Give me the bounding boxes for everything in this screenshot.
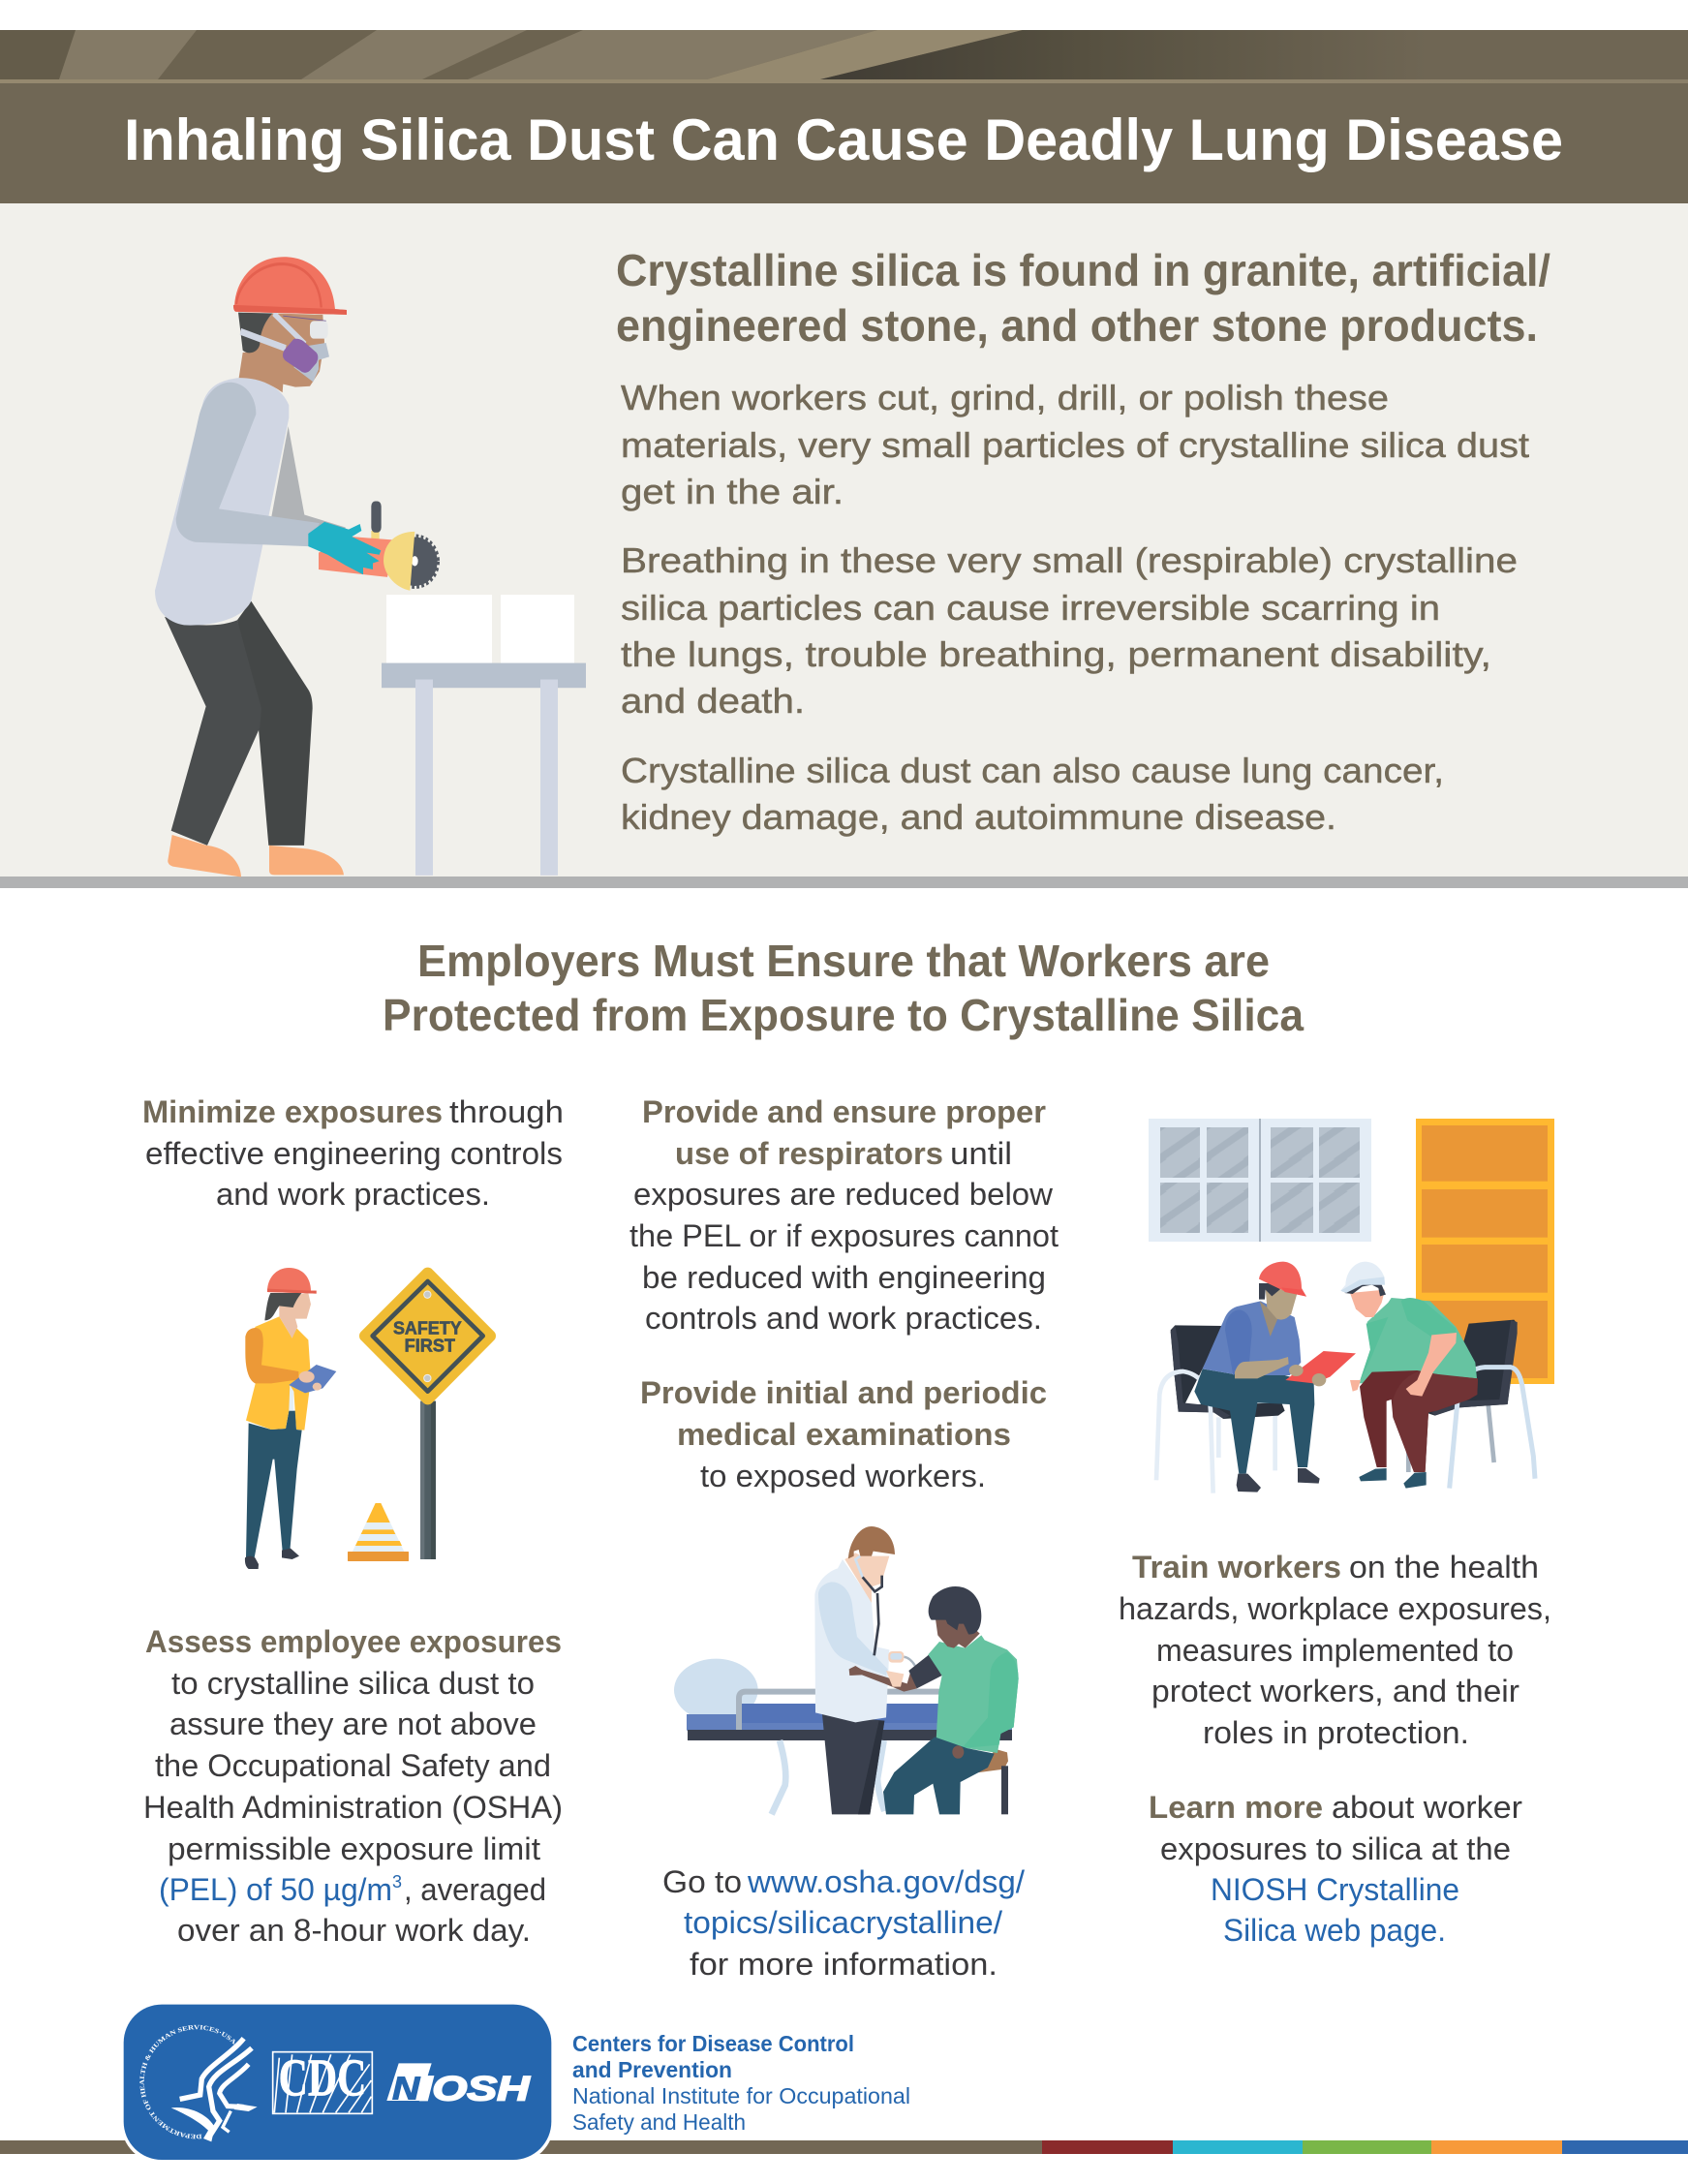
text block: other diseases: Crystalline silica dust can also cause lung cancer, xyxy=(621,751,1444,790)
text block: assess employee exposures: assure they are not above xyxy=(169,1707,537,1741)
text block: medical examinations: Provide initial and periodic xyxy=(640,1375,1047,1410)
text block: train workers xyxy=(1119,1550,1551,1750)
heading: where silica is found xyxy=(616,245,1550,351)
safety first sign xyxy=(365,1274,490,1399)
text block: respirators: the PEL or if exposures cannot xyxy=(629,1218,1059,1253)
illustration: worker with grinder at table xyxy=(155,257,586,877)
text block: respirators: until xyxy=(950,1136,1012,1171)
agency names: and Prevention xyxy=(572,2057,732,2082)
agency names: Safety and Health xyxy=(572,2109,746,2135)
text block: assess employee exposures xyxy=(143,1624,563,1948)
shelves xyxy=(1416,1119,1554,1384)
logo: CDC: CDC xyxy=(279,2048,366,2107)
text block: assess employee exposures: to crystalline silica dust to xyxy=(171,1666,535,1701)
text block: learn more: about worker xyxy=(1332,1790,1522,1825)
text block: assess employee exposures: , averaged xyxy=(404,1872,546,1907)
text block: respirators: controls and work practices. xyxy=(645,1301,1042,1336)
leaning worker in green xyxy=(1340,1262,1478,1489)
text block: OSHA link: www.osha.gov/dsg/ xyxy=(747,1864,1025,1899)
illustration: inspector and safety sign xyxy=(245,1268,490,1569)
text block: assess employee exposures: Health Administration (OSHA) xyxy=(143,1790,563,1825)
illustration: doctor examining worker xyxy=(674,1526,1019,1814)
logo panel xyxy=(124,2005,552,2160)
heading: employers must ensure: Employers Must Ensure that Workers are xyxy=(417,936,1270,986)
text block: train workers: protect workers, and their xyxy=(1151,1674,1519,1708)
heading: where silica is found: engineered stone, and other stone products. xyxy=(616,300,1538,351)
text block: assess employee exposures: Assess employee exposures xyxy=(145,1624,562,1659)
text block: learn more: Learn more xyxy=(1149,1790,1323,1825)
text block: respirators: Provide and ensure proper xyxy=(642,1094,1046,1129)
text block: train workers: measures implemented to xyxy=(1156,1633,1514,1668)
header banner xyxy=(0,30,1688,203)
text block: assess employee exposures: the Occupational Safety and xyxy=(155,1748,551,1783)
text block: minimize exposures: and work practices. xyxy=(216,1177,490,1212)
text block: respirators: be reduced with engineering xyxy=(642,1260,1046,1295)
text block: respirators: exposures are reduced below xyxy=(633,1177,1054,1212)
logo: HHS seal: DEPARTMENT OF HEALTH & HUMAN SERVICES·USA xyxy=(139,2024,235,2138)
text block: assess employee exposures: (PEL) of 50 µg/m xyxy=(159,1872,392,1907)
agency names: National Institute for Occupational xyxy=(572,2083,910,2108)
text block: how dust gets in the air: get in the air. xyxy=(621,472,844,511)
logo: NIOSH: IOSH xyxy=(419,2071,531,2108)
text block: medical examinations xyxy=(640,1375,1047,1493)
logo: NIOSH xyxy=(386,2063,531,2108)
inspector xyxy=(245,1268,336,1569)
heading: employers must ensure: Protected from Exposure to Crystalline Silica xyxy=(383,990,1304,1040)
text block: other diseases: kidney damage, and autoimmune disease. xyxy=(621,797,1336,837)
text block: respirators: use of respirators xyxy=(675,1136,943,1171)
agency names xyxy=(572,2031,910,2135)
column 2: respirators and medical exams xyxy=(629,1094,1059,1982)
text block: OSHA link: topics/silicacrystalline/ xyxy=(684,1905,1002,1940)
text block: train workers: Train workers xyxy=(1132,1550,1341,1584)
traffic cone xyxy=(348,1503,409,1561)
safety first sign: SAFETY xyxy=(393,1318,462,1338)
text block: learn more: exposures to silica at the xyxy=(1160,1831,1511,1866)
heading: where silica is found: Crystalline silica is found in granite, artificial/ xyxy=(616,245,1550,295)
text block: medical examinations: to exposed workers. xyxy=(700,1459,986,1493)
seated worker in blue xyxy=(1194,1262,1356,1492)
text block: assess employee exposures: 3 xyxy=(392,1872,402,1892)
text block: minimize exposures xyxy=(142,1094,564,1212)
text block: learn more: NIOSH Crystalline xyxy=(1211,1872,1459,1907)
roof band xyxy=(0,30,1688,83)
text block: how dust gets in the air xyxy=(621,378,1529,511)
panel: silica hazard xyxy=(0,203,1688,888)
text block: medical examinations: medical examinations xyxy=(677,1417,1011,1452)
left chair xyxy=(1156,1325,1285,1493)
text block: health effects: the lungs, trouble breathing, permanent disability, xyxy=(621,634,1491,674)
text block: train workers: roles in protection. xyxy=(1203,1715,1469,1750)
title: Inhaling Silica Dust Can Cause Deadly Lung Disease xyxy=(124,108,1563,172)
text block: learn more xyxy=(1149,1790,1522,1948)
text block: how dust gets in the air: materials, very small particles of crystalline silica dust xyxy=(621,425,1529,465)
safety first sign: FIRST xyxy=(405,1336,456,1356)
column 3: training and learn more xyxy=(1119,1119,1554,1948)
logo: NIOSH: N xyxy=(392,2071,420,2107)
footer xyxy=(0,2005,1688,2160)
right chair xyxy=(1408,1320,1535,1489)
illustration: workers in training xyxy=(1149,1119,1554,1493)
text block: minimize exposures: Minimize exposures xyxy=(142,1094,443,1129)
text block: assess employee exposures: permissible exposure limit xyxy=(168,1831,540,1866)
color stripe xyxy=(0,2140,1688,2154)
text block: train workers: on the health xyxy=(1349,1550,1539,1584)
text block: health effects: and death. xyxy=(621,681,805,721)
text block: how dust gets in the air: When workers cut, grind, drill, or polish these xyxy=(621,378,1389,417)
text block: minimize exposures: effective engineering controls xyxy=(145,1136,563,1171)
text block: train workers: hazards, workplace exposures, xyxy=(1119,1591,1551,1626)
window xyxy=(1149,1119,1371,1242)
text block: OSHA link: Go to xyxy=(662,1864,742,1899)
text block: OSHA link: for more information. xyxy=(690,1947,997,1982)
text block: OSHA link xyxy=(662,1864,1025,1982)
column 1: minimize and assess xyxy=(142,1094,564,1948)
text block: assess employee exposures: over an 8-hour work day. xyxy=(177,1913,531,1948)
text block: health effects: silica particles can cause irreversible scarring in xyxy=(621,588,1440,628)
text block: health effects: Breathing in these very small (respirable) crystalline xyxy=(621,540,1518,580)
text block: learn more: Silica web page. xyxy=(1223,1913,1446,1948)
text block: respirators xyxy=(629,1094,1059,1336)
text block: health effects xyxy=(621,540,1518,721)
agency names: Centers for Disease Control xyxy=(572,2031,854,2056)
text block: minimize exposures: through xyxy=(449,1094,564,1129)
text block: other diseases xyxy=(621,751,1444,837)
sign post xyxy=(420,1401,436,1559)
heading: employers must ensure xyxy=(383,936,1304,1040)
